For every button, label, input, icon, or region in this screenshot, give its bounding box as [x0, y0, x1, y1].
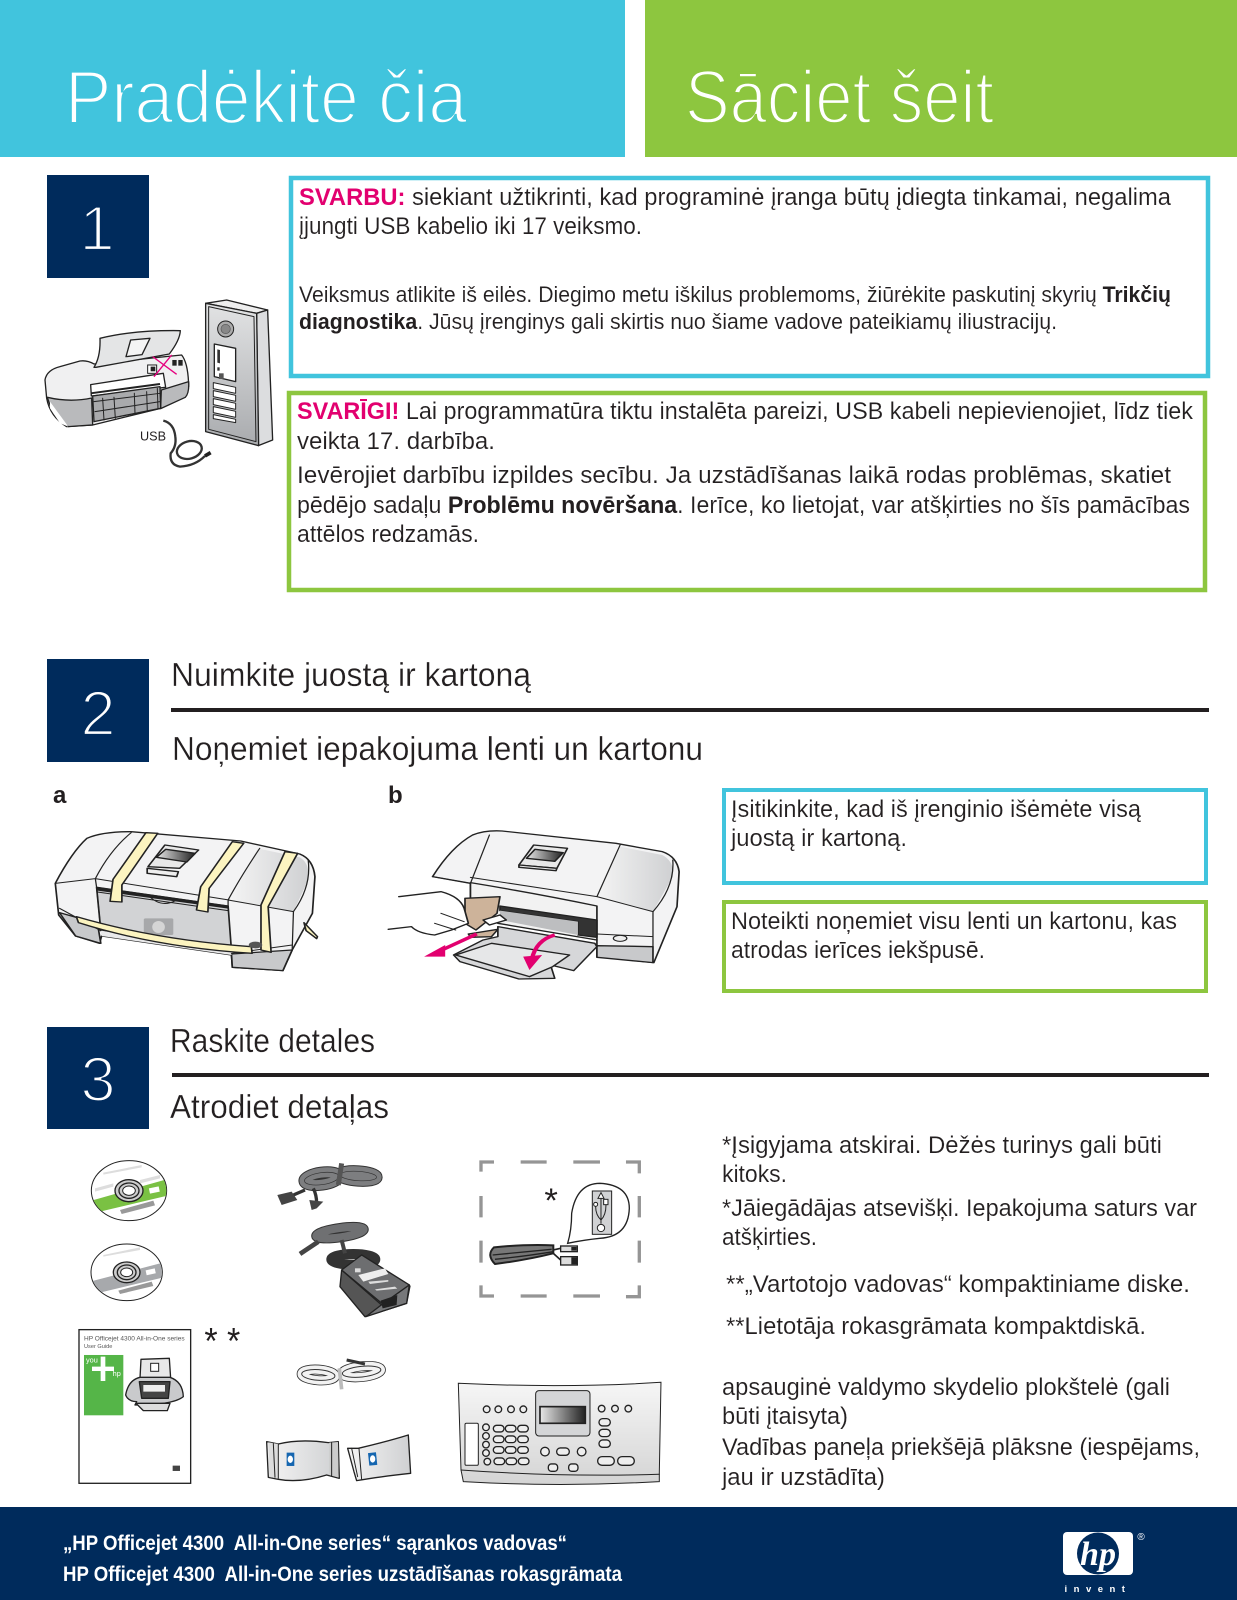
note: items purchased separately and guide on CD: [722, 1132, 1197, 1340]
callout: Latvian important note: veikta 17. darbība.: [297, 428, 495, 455]
callout: Lithuanian important note: Veiksmus atlikite iš eilės. Diegimo metu iškilus problemoms, žiūrėkite paskutinį skyrių Trikčių: [299, 282, 1171, 307]
step 1 number badge: 1: [79, 194, 115, 264]
icon: hp invent logo: [1063, 1532, 1145, 1595]
callout: Latvian important note: Ievērojiet darbību izpildes secību. Ja uzstādīšanas laikā rodas problēmas, skatiet: [297, 462, 1171, 489]
callout: Lithuanian tape note: [724, 790, 1206, 883]
note: control panel faceplate: būti įtaisyta): [722, 1403, 848, 1430]
note: items purchased separately and guide on CD: **Lietotāja rokasgrāmata kompaktdiskā.: [726, 1313, 1146, 1340]
icon: USB cable in dashed optional frame: *: [544, 1182, 558, 1220]
icon: control panel faceplate: [458, 1382, 661, 1484]
header: Latvian title band: [645, 0, 1237, 157]
note: control panel faceplate: [721, 1374, 1200, 1491]
illustration a: printer with packing tape: [55, 832, 317, 971]
footer guide titles: HP Officejet 4300 All-in-One series uzstādīšanas rokasgrāmata: [63, 1563, 622, 1586]
icon: ink cartridge 2: [348, 1435, 411, 1481]
callout: Latvian important note: pēdējo sadaļu Problēmu novēršana. Ierīce, ko lietojat, var atšķirties no šīs pamācības: [297, 492, 1190, 519]
icon: ink cartridge 1: [267, 1441, 339, 1481]
step 3 number badge: 3: [80, 1045, 116, 1115]
callout: Latvian tape note: atrodas ierīces iekšpusē.: [731, 937, 985, 964]
step 3 heading: Raskite detales: [170, 1022, 375, 1059]
footer band: [0, 1507, 1237, 1600]
note: control panel faceplate: Vadības paneļa priekšējā plāksne (iespējams,: [722, 1434, 1200, 1461]
callout: Latvian important note: [289, 393, 1205, 590]
step 2 heading: [171, 656, 1209, 767]
label: USB: USB: [140, 430, 166, 444]
step 3 heading: [170, 1022, 1209, 1125]
step 2 heading: Nuimkite juostą ir kartoną: [171, 656, 532, 693]
step 2 heading: Noņemiet iepakojuma lenti un kartonu: [172, 730, 703, 767]
callout: Latvian tape note: [724, 902, 1206, 991]
icon: hp invent logo: hp: [1080, 1536, 1116, 1573]
callout: Lithuanian important note: SVARBU: siekiant užtikrinti, kad programinė įranga būtų įdiegta tinkamai, negalima: [299, 184, 1172, 211]
note: items purchased separately and guide on CD: **„Vartotojo vadovas“ kompaktiniame diske.: [726, 1271, 1190, 1298]
icon: user guide booklet: hp: [113, 1369, 121, 1378]
step 2 number badge: [47, 659, 149, 762]
callout: Lithuanian important note: diagnostika. Jūsų įrenginys gali skirtis nuo šiame vadove pateikiamų iliustracijų.: [299, 309, 1057, 334]
step 2 number badge: 2: [80, 679, 116, 749]
illustration: printer and computer USB connection: [45, 300, 273, 467]
footer guide titles: [63, 1532, 622, 1586]
header: Lithuanian title band: Pradėkite čia: [65, 55, 467, 139]
note: control panel faceplate: apsauginė valdymo skydelio plokštelė (gali: [722, 1374, 1170, 1401]
header: Lithuanian title band: [0, 0, 625, 157]
icon: user guide booklet: User Guide: [84, 1344, 112, 1350]
step 3 heading: Atrodiet detaļas: [170, 1088, 389, 1125]
header: Latvian title band: Sāciet šeit: [685, 55, 994, 139]
icon: power cord: [277, 1163, 377, 1210]
illustration b: printer, removing cardboard: [388, 831, 679, 979]
icon: power adapter: [300, 1225, 410, 1317]
icon: user guide booklet: HP Officejet 4300 All-in-One series: [84, 1336, 185, 1343]
footer guide titles: „HP Officejet 4300 All-in-One series“ sąrankos vadovas“: [63, 1532, 567, 1555]
step 3 number badge: [47, 1027, 149, 1129]
icon: user guide booklet: [79, 1330, 191, 1483]
parts: CDs, guide, cords, ink cartridges: [79, 1161, 411, 1483]
label b: b: [388, 782, 403, 809]
callout: Lithuanian important note: įjungti USB kabelio iki 17 veiksmo.: [299, 213, 642, 240]
double asterisk: * *: [204, 1320, 240, 1361]
label a: a: [53, 782, 67, 809]
icon: gray CD: [90, 1244, 167, 1301]
callout: Lithuanian tape note: Įsitikinkite, kad iš įrenginio išėmėte visą: [731, 796, 1142, 823]
note: control panel faceplate: jau ir uzstādīta): [721, 1464, 885, 1491]
icon: USB cable in dashed optional frame: [481, 1162, 639, 1297]
parts: optional USB cable and faceplate: [458, 1162, 661, 1484]
step 1 number badge: [47, 175, 149, 278]
callout: Lithuanian important note: [291, 178, 1208, 376]
note: items purchased separately and guide on CD: kitoks.: [722, 1161, 787, 1188]
note: items purchased separately and guide on CD: *Jāiegādājas atsevišķi. Iepakojuma saturs var: [722, 1195, 1197, 1222]
icon: hp invent logo: ®: [1137, 1532, 1145, 1543]
note: items purchased separately and guide on CD: *Įsigyjama atskirai. Dėžės turinys gali būti: [722, 1132, 1162, 1159]
icon: green CD: [90, 1161, 170, 1221]
callout: Latvian tape note: Noteikti noņemiet visu lenti un kartonu, kas: [731, 908, 1177, 935]
callout: Lithuanian tape note: juostą ir kartoną.: [730, 825, 907, 852]
icon: user guide booklet: you: [86, 1356, 98, 1365]
note: items purchased separately and guide on CD: atšķirties.: [722, 1224, 817, 1251]
callout: Latvian important note: attēlos redzamās.: [297, 521, 479, 548]
callout: Latvian important note: SVARĪGI! Lai programmatūra tiktu instalēta pareizi, USB kabeli nepievienojiet, līdz tiek: [297, 398, 1194, 425]
icon: hp invent logo: invent: [1065, 1584, 1131, 1595]
icon: phone cord: [301, 1360, 381, 1389]
